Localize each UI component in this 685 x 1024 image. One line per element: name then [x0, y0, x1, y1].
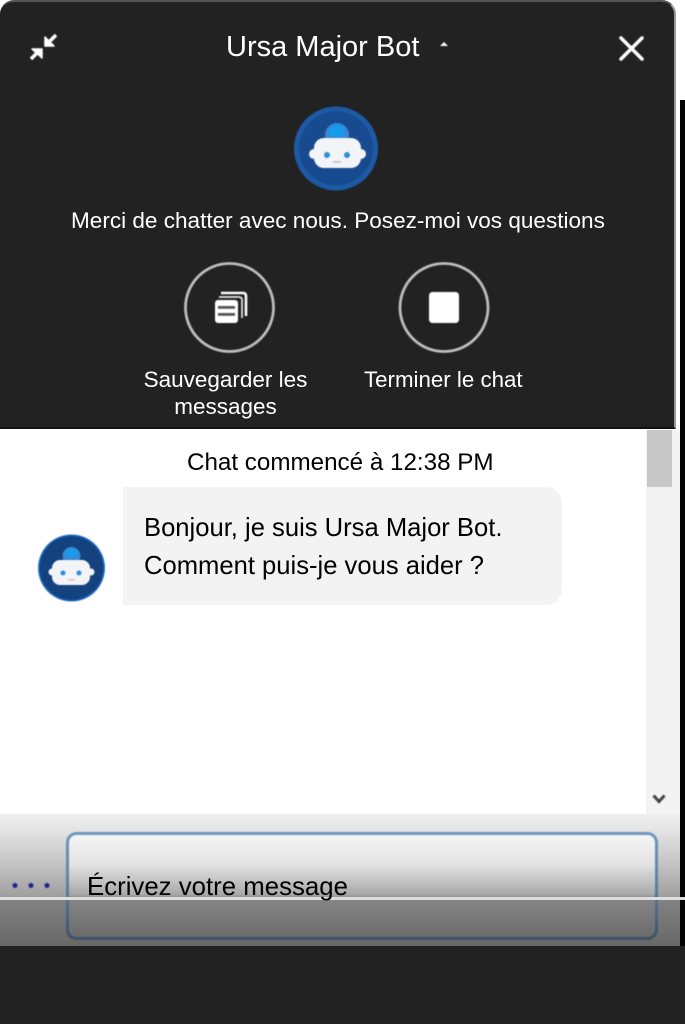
scrollbar	[646, 430, 680, 814]
label: save messages: messages	[174, 394, 277, 419]
button: save messages	[144, 261, 307, 419]
icon: bot avatar large	[293, 106, 379, 192]
label: save messages: Sauvegarder les	[144, 367, 307, 392]
icon: save circle	[183, 261, 276, 354]
input placeholder: Écrivez votre message	[87, 873, 348, 901]
header panel	[0, 0, 676, 429]
label: end chat: Terminer le chat	[364, 367, 523, 392]
horizontal white line	[0, 897, 685, 900]
button: end chat	[364, 261, 523, 392]
title: Ursa Major Bot	[226, 31, 419, 63]
bottom dark band	[0, 946, 685, 1024]
icon: stop circle	[398, 261, 490, 354]
message input box	[65, 831, 659, 940]
intro text: Merci de chatter avec nous. Posez-moi vos questions	[71, 208, 605, 233]
bubble message: Comment puis-je vous aider ?	[144, 552, 484, 580]
label: save messages	[144, 367, 307, 419]
icon: bot avatar small	[37, 534, 106, 602]
right black edge	[680, 100, 685, 946]
chat bubble	[123, 487, 562, 605]
icon: scroll down chevron	[652, 794, 666, 804]
icon: small caret	[440, 42, 448, 47]
scrollbar thumb	[647, 430, 672, 487]
icon: close	[618, 36, 644, 62]
bubble message: Bonjour, je suis Ursa Major Bot.	[144, 514, 502, 542]
icon: typing dots	[12, 882, 50, 888]
chat start time: Chat commencé à 12:38 PM	[187, 449, 494, 476]
icon: minimize arrows	[29, 33, 58, 61]
footer input area	[0, 814, 680, 946]
bubble message	[144, 514, 502, 580]
